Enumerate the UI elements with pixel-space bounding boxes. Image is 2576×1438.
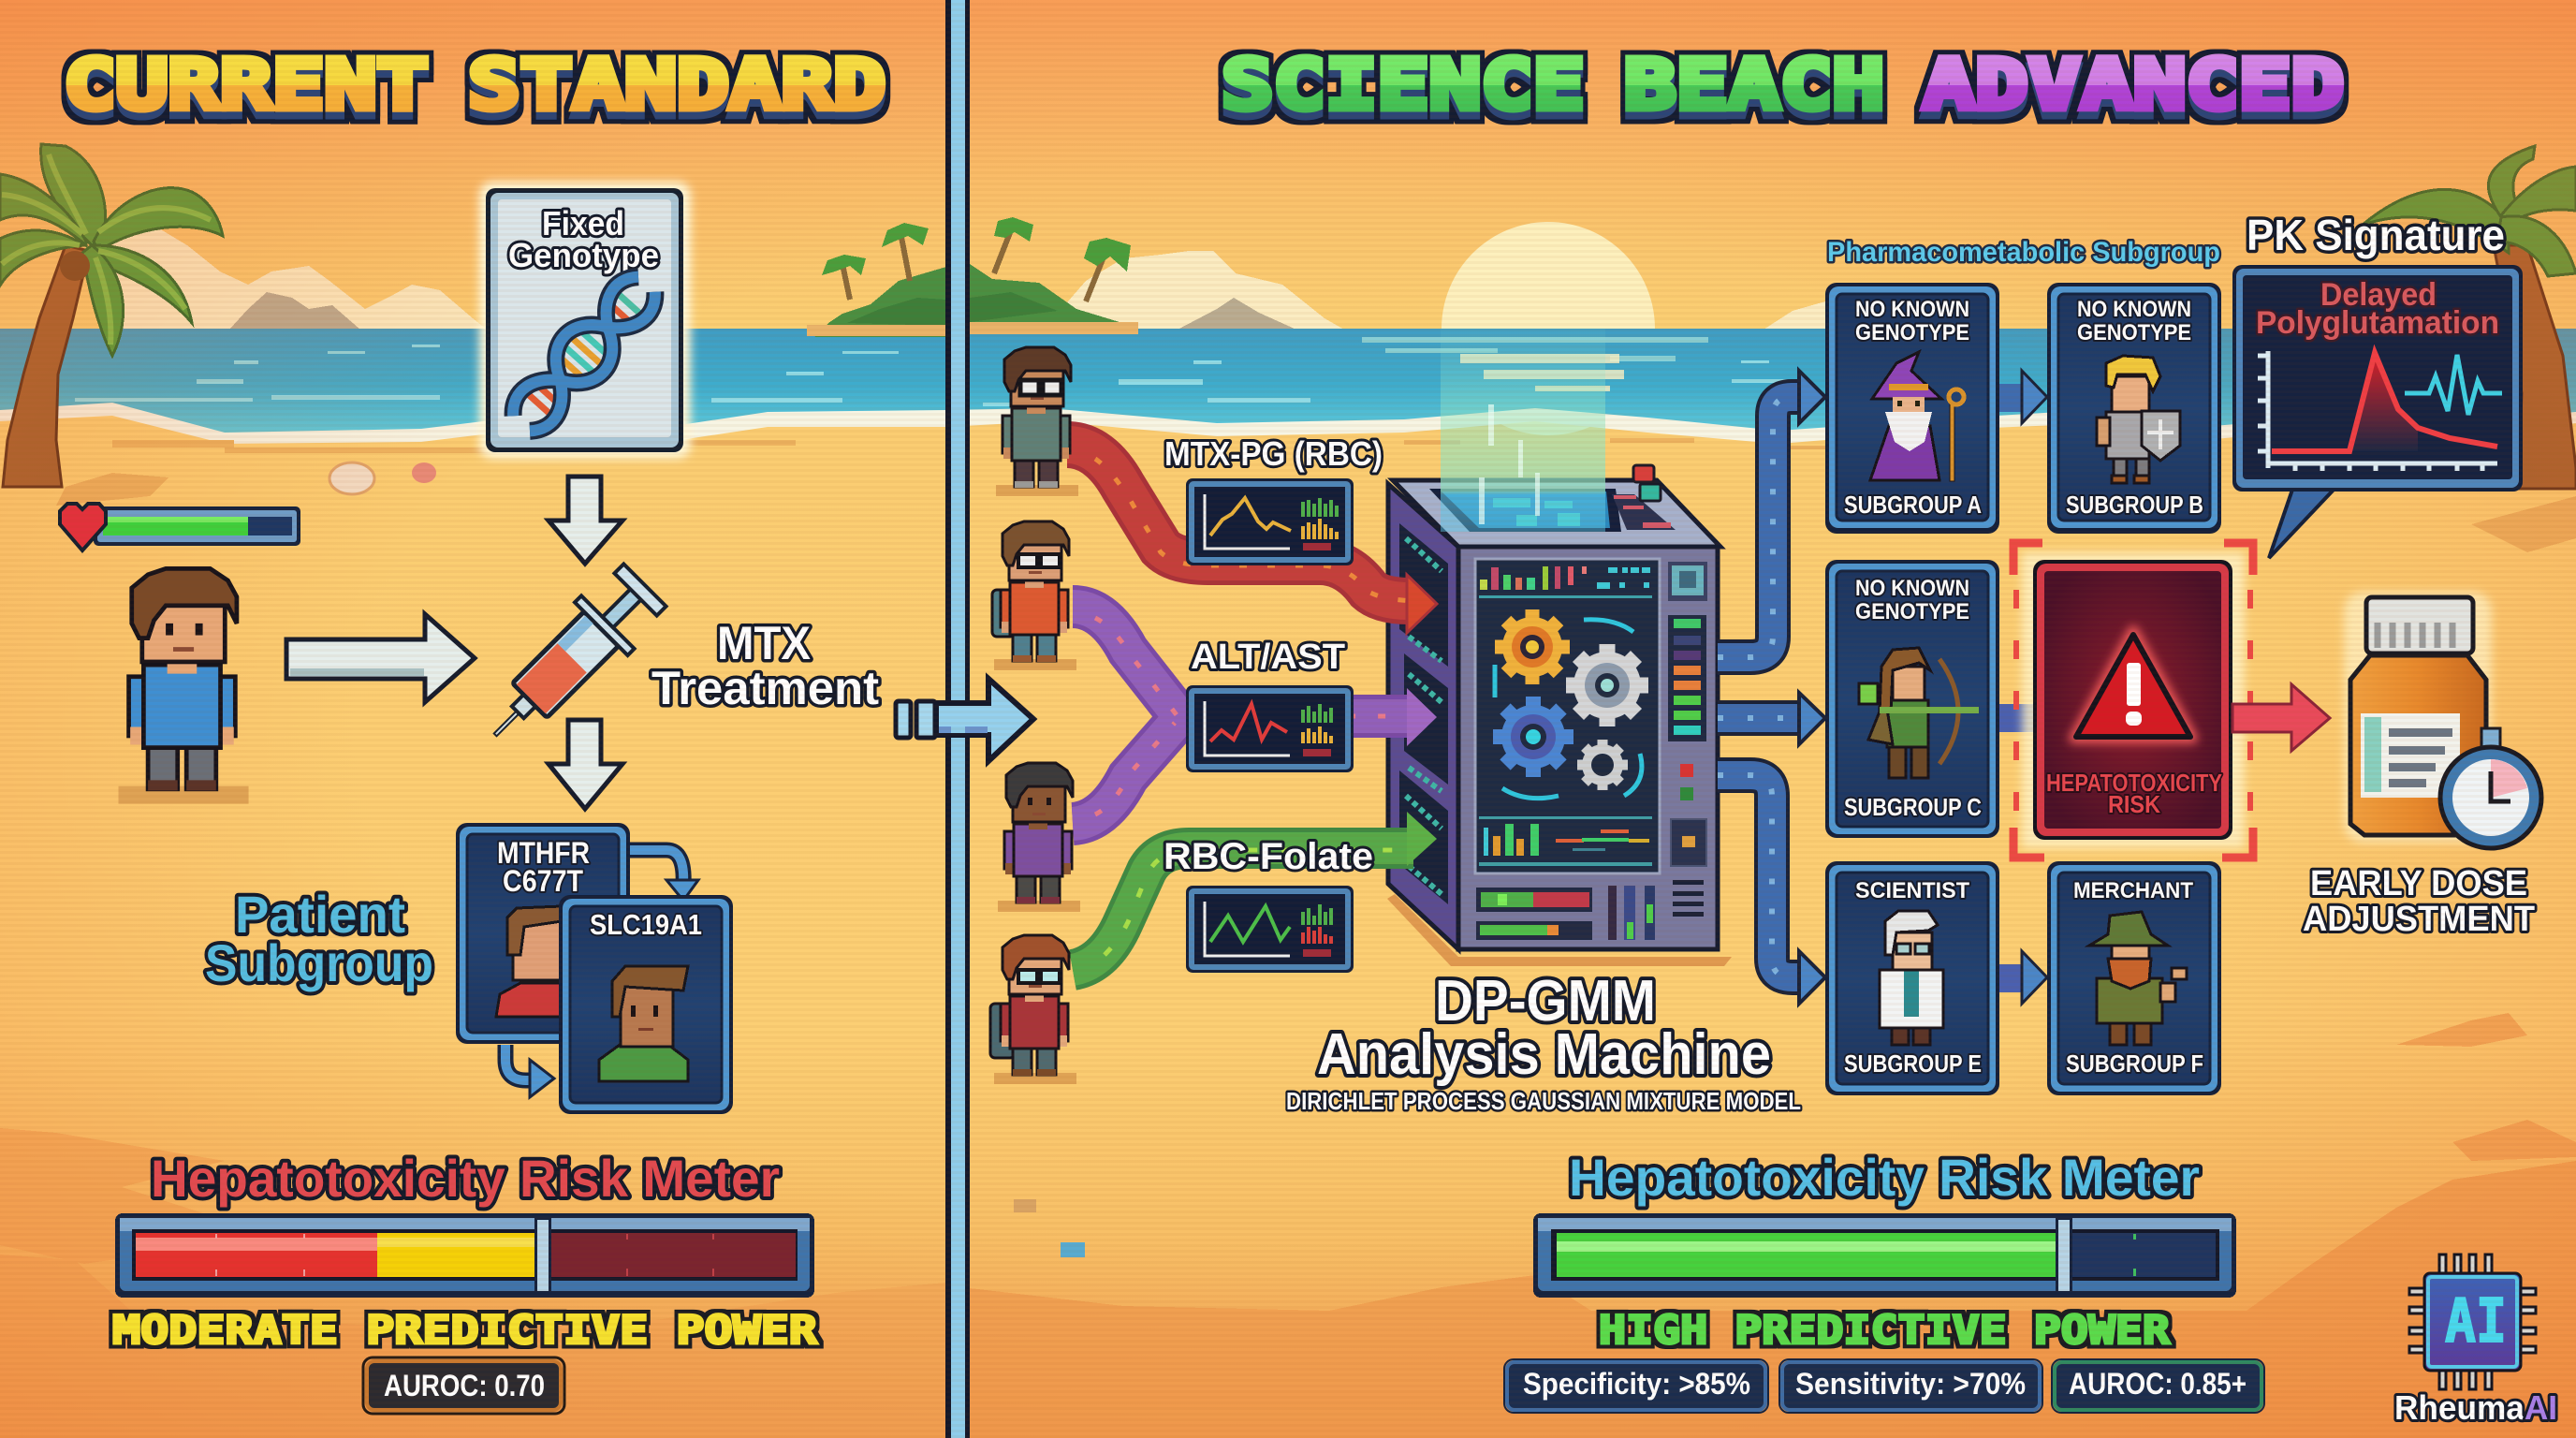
heading: right risk meter: Hepatotoxicity Risk Meter — [1569, 1148, 2200, 1207]
icon: heart — [60, 504, 106, 550]
moderate predictive power label: MODERATE PREDICTIVE POWER — [112, 1307, 818, 1353]
arrow: treatment to subgroup — [549, 720, 622, 809]
title: science beach advanced: ADVANCED — [1923, 45, 2344, 125]
character: researcher four — [990, 935, 1076, 1084]
flow pipes to subgroups — [1718, 371, 1825, 1004]
arrow: subgroup C to risk — [1999, 704, 2035, 732]
health bar with heart — [60, 504, 300, 550]
stat badge: specificity: Specificity: >85% — [1523, 1367, 1750, 1401]
icon: DNA helix — [502, 267, 666, 441]
patient character — [119, 568, 249, 804]
right palm tree — [2363, 146, 2576, 489]
label: MTX treatment: Treatment — [651, 662, 879, 714]
gear: small silver — [1577, 740, 1628, 790]
sand band wet shoreline — [112, 438, 1844, 453]
title: science beach advanced — [1222, 45, 2344, 125]
portrait: green shirt patient — [599, 966, 688, 1081]
card: hepatotoxicity risk alert: RISK — [2108, 790, 2160, 818]
machine base shadow — [1387, 894, 1732, 966]
chart panel: MTX-PG — [1186, 478, 1354, 565]
machine top buttons — [1633, 465, 1661, 501]
character: researcher three — [998, 763, 1080, 912]
label: early dose adjustment — [2303, 864, 2535, 939]
portrait: red shirt patient — [496, 906, 562, 1017]
background: ocean — [0, 329, 2576, 444]
callout: PK signature: PK Signature — [2247, 211, 2505, 259]
logo: RheumaAI chip: RheumaAI — [2394, 1388, 2557, 1427]
card: subgroup C archer: SUBGROUP C — [1844, 793, 1982, 821]
left palm tree — [0, 144, 223, 487]
title: current standard: CURRENT — [64, 45, 429, 125]
background: beach sand — [0, 412, 2576, 1438]
arrow: subgroup A to B — [1999, 371, 2047, 423]
AUROC badge left: AUROC: 0.70 — [384, 1369, 545, 1402]
card: subgroup A wizard: SUBGROUP A — [1844, 491, 1982, 519]
card: subgroup A wizard: NO KNOWN — [1855, 297, 1969, 322]
card: subgroup C archer — [1825, 560, 1999, 838]
background: sky — [0, 0, 2576, 330]
AUROC badge left — [363, 1357, 564, 1414]
background: sun — [1442, 222, 1655, 435]
label: DP-GMM analysis machine: DIRICHLET PROCESS GAUSSIAN MIXTURE MODEL — [1286, 1087, 1801, 1115]
card: subgroup A wizard — [1825, 283, 1999, 534]
center divider — [945, 0, 970, 1438]
genotype label: Genotype — [508, 236, 659, 274]
chart panel: RBC-Folate — [1186, 886, 1354, 973]
left risk meter bar — [115, 1213, 814, 1298]
card: MTHFR: MTHFR — [497, 836, 590, 870]
divider arrow — [896, 679, 1033, 761]
card: MTHFR: C677T — [503, 864, 583, 898]
icon: archer — [1859, 648, 1930, 778]
character: researcher one — [996, 347, 1078, 496]
arrow: patient to treatment — [286, 614, 475, 702]
icon: medicine bottle with stopwatch — [2344, 592, 2541, 848]
panel: DP-GMM analysis machine — [1387, 465, 1732, 966]
panel: patient subgroup cards — [456, 823, 733, 1114]
icon: MTX syringe — [469, 559, 671, 761]
card: subgroup B knight — [2047, 283, 2221, 534]
callout: PK signature: Polyglutamation — [2256, 305, 2499, 341]
card: subgroup F merchant — [2047, 861, 2221, 1095]
machine top face — [1393, 480, 1720, 547]
label: MTX-PG (RBC): MTX-PG (RBC) — [1164, 434, 1383, 473]
character: researcher two — [992, 521, 1076, 670]
card: subgroup B knight: SUBGROUP B — [2066, 491, 2203, 519]
flow: green RBC-Folate stream — [1073, 812, 1437, 970]
hologram beam — [1441, 328, 1605, 532]
target corner brackets — [2013, 543, 2253, 858]
stat badge: sensitivity — [1779, 1359, 2042, 1413]
genotype label — [508, 204, 659, 274]
label: early dose adjustment: ADJUSTMENT — [2303, 900, 2535, 939]
icon: wizard — [1870, 352, 1964, 481]
card: SLC19A1: SLC19A1 — [590, 908, 702, 941]
chart panel: ALT/AST — [1186, 685, 1354, 772]
stat badge: specificity — [1504, 1359, 1768, 1413]
screen charts — [1479, 816, 1652, 866]
right risk meter bar — [1533, 1213, 2236, 1298]
card: subgroup B knight: GENOTYPE — [2077, 320, 2191, 345]
card: subgroup F merchant: MERCHANT — [2073, 878, 2193, 903]
card: subgroup C archer: NO KNOWN — [1855, 576, 1969, 601]
flow: red MTX-PG stream — [1067, 445, 1437, 633]
logo: RheumaAI chip: AI — [2445, 1287, 2507, 1357]
arrow: subgroup E to F — [1999, 951, 2047, 1004]
heading: left risk meter: Hepatotoxicity Risk Meter — [151, 1149, 780, 1208]
background: clouds and mountains — [112, 228, 1900, 330]
gear: large silver — [1566, 644, 1648, 726]
card: subgroup C archer: GENOTYPE — [1855, 599, 1969, 624]
card: hepatotoxicity risk alert — [2013, 543, 2253, 858]
stat badge: sensitivity: Sensitivity: >70% — [1795, 1367, 2026, 1401]
stat badge: AUROC right — [2052, 1359, 2264, 1413]
card: hepatotoxicity risk alert: HEPATOTOXICITY — [2046, 769, 2222, 797]
label: DP-GMM analysis machine — [1286, 969, 1801, 1115]
heading: pharmacometabolic subgroup: Pharmacometabolic Subgroup — [1827, 237, 2220, 268]
gear: orange — [1495, 609, 1570, 684]
logo: RheumaAI chip — [2394, 1255, 2557, 1427]
stat badge: AUROC right: AUROC: 0.85+ — [2069, 1367, 2247, 1401]
label: DP-GMM analysis machine: Analysis Machine — [1317, 1022, 1771, 1087]
label: RBC-Folate: RBC-Folate — [1164, 836, 1373, 877]
card: subgroup F merchant: SUBGROUP F — [2066, 1049, 2203, 1078]
machine front face — [1458, 547, 1718, 949]
card: subgroup E scientist: SUBGROUP E — [1844, 1049, 1982, 1078]
machine side instruments — [1476, 562, 1707, 940]
label: MTX treatment — [651, 617, 879, 714]
label: DP-GMM analysis machine: DP-GMM — [1435, 969, 1656, 1034]
flow: purple ALT/AST streams — [1073, 607, 1437, 824]
label: patient subgroup: Patient — [235, 885, 405, 944]
card: MTHFR — [456, 823, 630, 1044]
panel: fixed genotype card — [479, 182, 691, 459]
callout: PK signature — [2232, 211, 2523, 558]
gear: blue — [1493, 697, 1573, 777]
label: MTX treatment: MTX — [717, 617, 811, 669]
title: science beach advanced: BEACH — [1624, 45, 1884, 125]
PK curve chart — [2258, 351, 2502, 471]
beach shells and stones — [329, 462, 1085, 1257]
label: early dose adjustment: EARLY DOSE — [2310, 864, 2527, 903]
callout: PK signature: Delayed — [2320, 277, 2437, 313]
label: patient subgroup — [205, 885, 433, 992]
card: subgroup E scientist — [1825, 861, 1999, 1095]
card: subgroup B knight: NO KNOWN — [2077, 297, 2191, 322]
card: SLC19A1 — [559, 895, 733, 1114]
genotype label: Fixed — [542, 204, 624, 242]
icon: knight — [2097, 356, 2180, 483]
icon: merchant — [2089, 912, 2187, 1045]
small island right — [970, 217, 1138, 334]
label: ALT/AST: ALT/AST — [1191, 638, 1345, 677]
title: current standard: STANDARD — [468, 45, 886, 125]
machine left face — [1388, 484, 1458, 949]
arrow: risk to dose adjustment — [2232, 684, 2330, 751]
arrow: genotype to treatment — [549, 477, 622, 564]
title: current standard — [64, 45, 886, 125]
icon: warning triangle — [2073, 630, 2193, 739]
small island left — [807, 223, 946, 337]
card: subgroup E scientist: SCIENTIST — [1855, 878, 1969, 903]
background: bottom dunes — [0, 473, 2576, 1438]
icon: stopwatch — [2440, 728, 2541, 848]
high predictive power label: HIGH PREDICTIVE POWER — [1599, 1307, 2171, 1353]
title: science beach advanced: SCIENCE — [1222, 45, 1585, 125]
card: subgroup A wizard: GENOTYPE — [1855, 320, 1969, 345]
label: patient subgroup: Subgroup — [205, 933, 433, 992]
icon: scientist — [1880, 911, 1943, 1045]
curved arrows between cards — [505, 850, 683, 1080]
machine screen — [1475, 559, 1660, 873]
